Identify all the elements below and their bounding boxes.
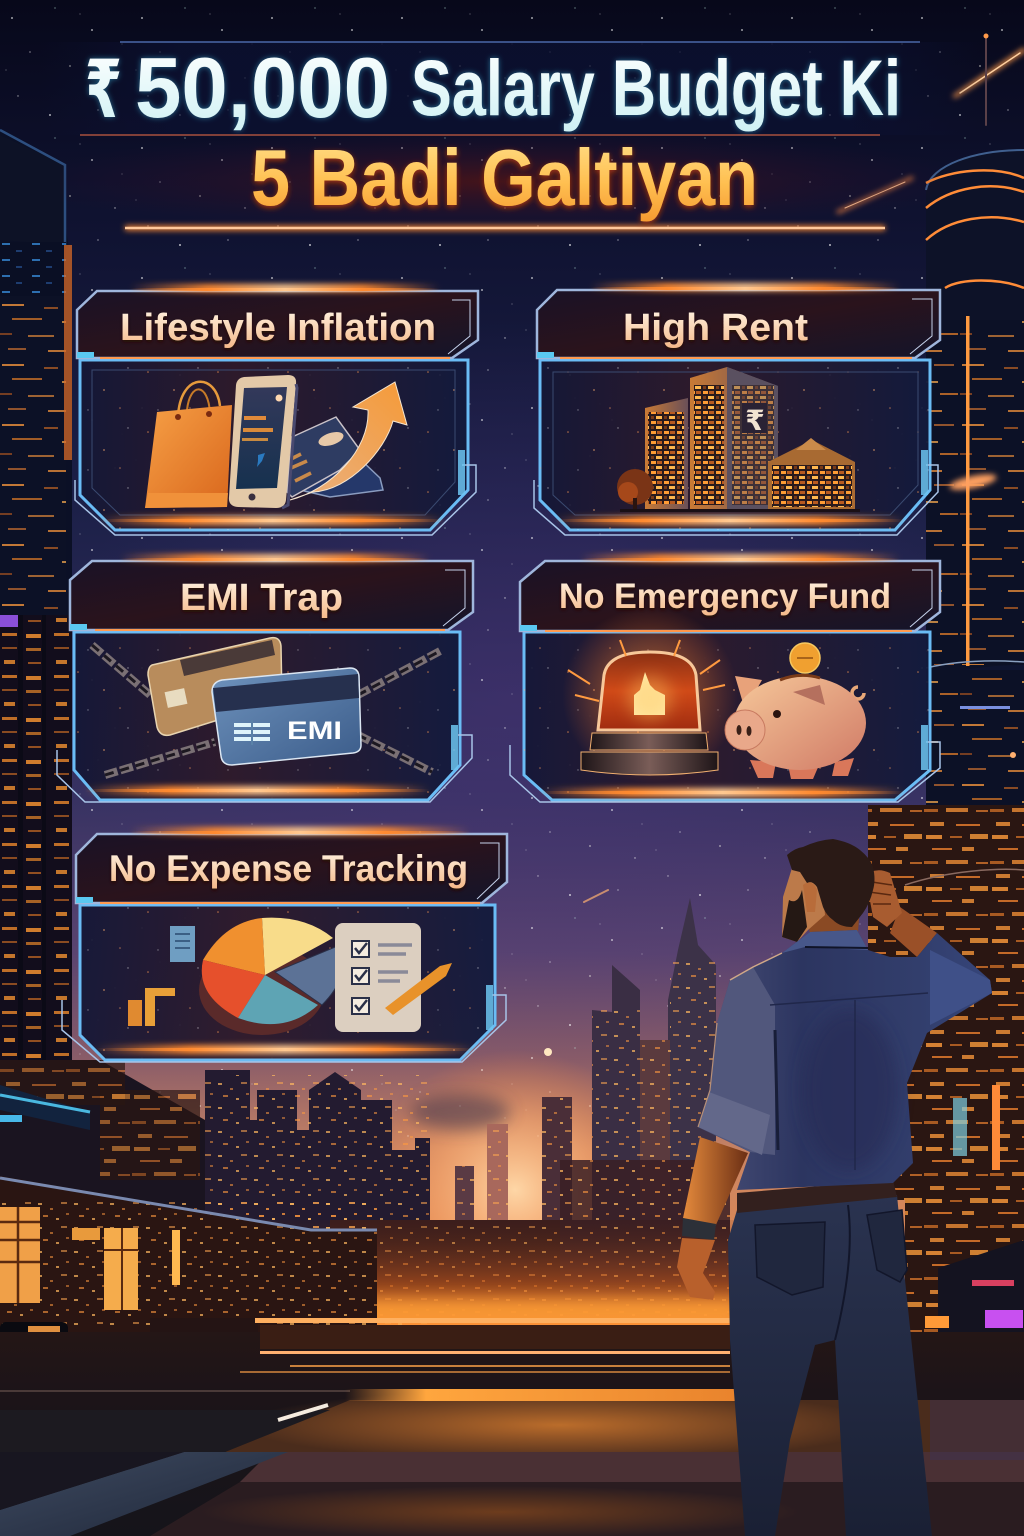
panel: No Expense Tracking bbox=[62, 827, 507, 1062]
title bands bbox=[40, 42, 980, 228]
panel body frame bbox=[62, 905, 506, 1062]
ground and waterfront bbox=[0, 1318, 1024, 1536]
right towers bbox=[868, 150, 1024, 1200]
icon: pie chart bbox=[199, 918, 343, 1035]
title line 2: 5 Badi Galtiyan bbox=[251, 133, 758, 222]
header: EMI Trap bbox=[70, 554, 473, 630]
panel body frame bbox=[57, 632, 472, 802]
icon: apartment buildings with rupee bbox=[617, 367, 860, 512]
panel: EMI Trap bbox=[57, 554, 473, 802]
man: left arm and hand bbox=[677, 1137, 748, 1300]
man: hair bbox=[787, 839, 874, 927]
title line 1 bbox=[85, 41, 901, 136]
man: raised forearm and hand bbox=[868, 870, 937, 957]
icon: apartment buildings with rupee: ₹ bbox=[745, 405, 765, 436]
header: No Expense Tracking: No Expense Tracking bbox=[109, 848, 468, 889]
header: High Rent: High Rent bbox=[623, 307, 808, 349]
header: No Emergency Fund bbox=[520, 554, 940, 631]
header: No Expense Tracking bbox=[76, 827, 507, 903]
right foreground building bbox=[905, 1180, 1024, 1345]
man: jeans bbox=[728, 1195, 932, 1536]
icon: checklist and pencil bbox=[335, 923, 452, 1032]
left foreground buildings bbox=[0, 1060, 377, 1372]
man looking at skyline bbox=[677, 839, 992, 1536]
header: High Rent bbox=[537, 283, 940, 358]
icon: alarm siren bbox=[562, 607, 738, 783]
icon: EMI credit card bbox=[212, 668, 361, 765]
panel body frame bbox=[534, 360, 938, 535]
header: Lifestyle Inflation bbox=[77, 284, 478, 358]
icon: EMI credit card: EMI bbox=[287, 717, 342, 745]
title line 1: ₹ bbox=[85, 45, 122, 134]
far city skyline bbox=[205, 898, 740, 1325]
man: belt bbox=[737, 1180, 897, 1213]
title bbox=[40, 41, 980, 228]
icon: rising arrow bbox=[290, 382, 407, 500]
icon: back card bbox=[148, 638, 282, 735]
man: neck and face bbox=[782, 850, 864, 942]
icon: chains bbox=[92, 645, 442, 775]
header: No Emergency Fund: No Emergency Fund bbox=[559, 577, 891, 616]
panel: No Emergency Fund bbox=[510, 554, 940, 802]
man: denim shirt bbox=[698, 930, 992, 1190]
icon: piggy bank with coin bbox=[725, 643, 866, 779]
panel: High Rent bbox=[534, 283, 940, 535]
header: EMI Trap: EMI Trap bbox=[180, 577, 343, 619]
panel body frame bbox=[510, 632, 940, 802]
icon: smartphone bbox=[229, 375, 297, 508]
icon: small document and bars bbox=[128, 926, 195, 1026]
panel: Lifestyle Inflation bbox=[75, 284, 478, 535]
icon: credit card bbox=[287, 417, 383, 497]
title line 1: 50,000 bbox=[135, 41, 390, 136]
shooting stars bbox=[584, 34, 1024, 902]
panel body frame bbox=[75, 360, 476, 535]
header: Lifestyle Inflation: Lifestyle Inflation bbox=[120, 307, 436, 349]
icon: shopping bag bbox=[145, 382, 232, 508]
left towers bbox=[0, 130, 72, 1060]
